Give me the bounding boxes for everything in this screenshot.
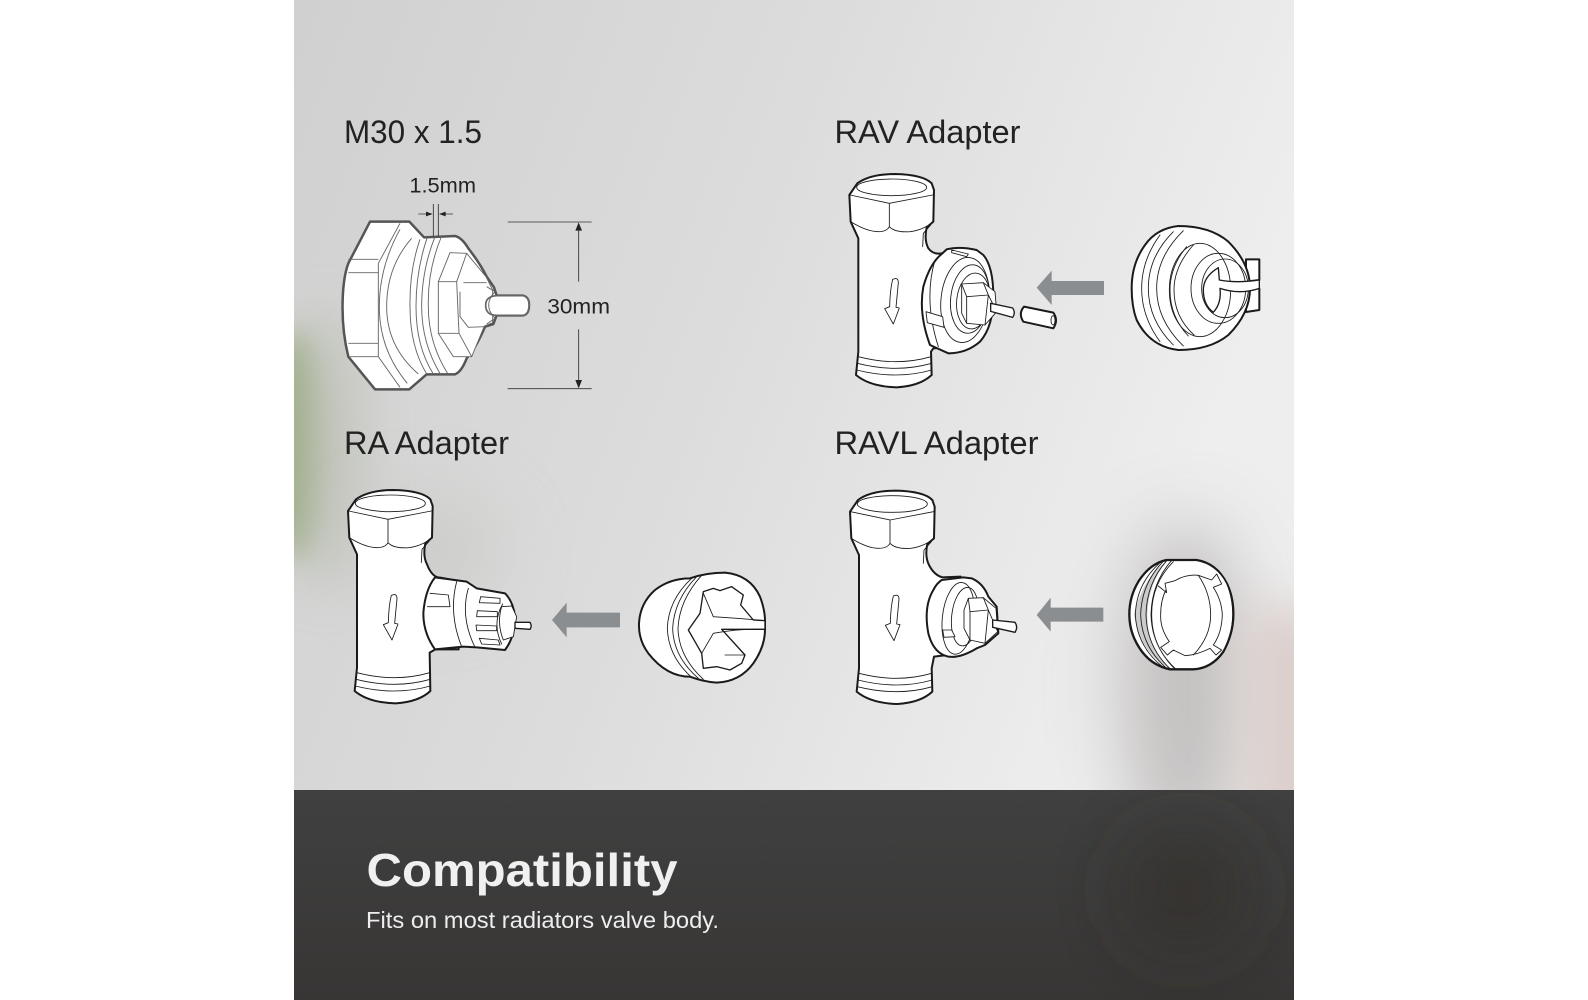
arrow: insertion direction (1037, 271, 1104, 305)
panel: light background (294, 0, 1294, 790)
icon: valve body (849, 174, 960, 387)
diagram: RA adapter (348, 490, 765, 703)
dimension: 30mm diameter (508, 222, 610, 389)
heading: RAV Adapter: RAV Adapter (834, 114, 1021, 150)
text: description: Fits on most radiators valve body. (366, 907, 719, 933)
icon: RA valve head with pin (423, 577, 531, 650)
arrow: insertion direction (552, 603, 620, 637)
dimension: 1.5mm thread pitch: 1.5mm (409, 175, 476, 198)
heading: RAVL Adapter: RAVL Adapter (834, 425, 1039, 461)
heading: M30 x 1.5: M30 x 1.5 (344, 114, 482, 150)
heading: RA Adapter: RA Adapter (344, 425, 509, 461)
dimension: 1.5mm thread pitch (409, 175, 476, 237)
diagram: M30 x 1.5 valve head with dimensions (343, 175, 610, 389)
icon: valve body (348, 490, 459, 703)
icon: valve body (850, 491, 961, 704)
icon: RAVL adapter ring (1129, 560, 1233, 669)
icon: valve pin head outline (343, 222, 529, 389)
icon: RA adapter plug (639, 573, 765, 683)
arrow: insertion direction (1037, 598, 1103, 632)
diagram: RAVL adapter (850, 491, 1233, 704)
icon: valve head with pin and cap (922, 248, 1056, 353)
icon: RAVL valve head with pin (927, 577, 1017, 657)
diagram: RAV adapter (849, 174, 1259, 387)
icon: RAV adapter ring (1132, 226, 1259, 350)
dimension: 30mm diameter: 30mm (547, 295, 610, 318)
heading: Compatibility: Compatibility (366, 844, 678, 896)
panel: dark caption band (294, 790, 1294, 1000)
